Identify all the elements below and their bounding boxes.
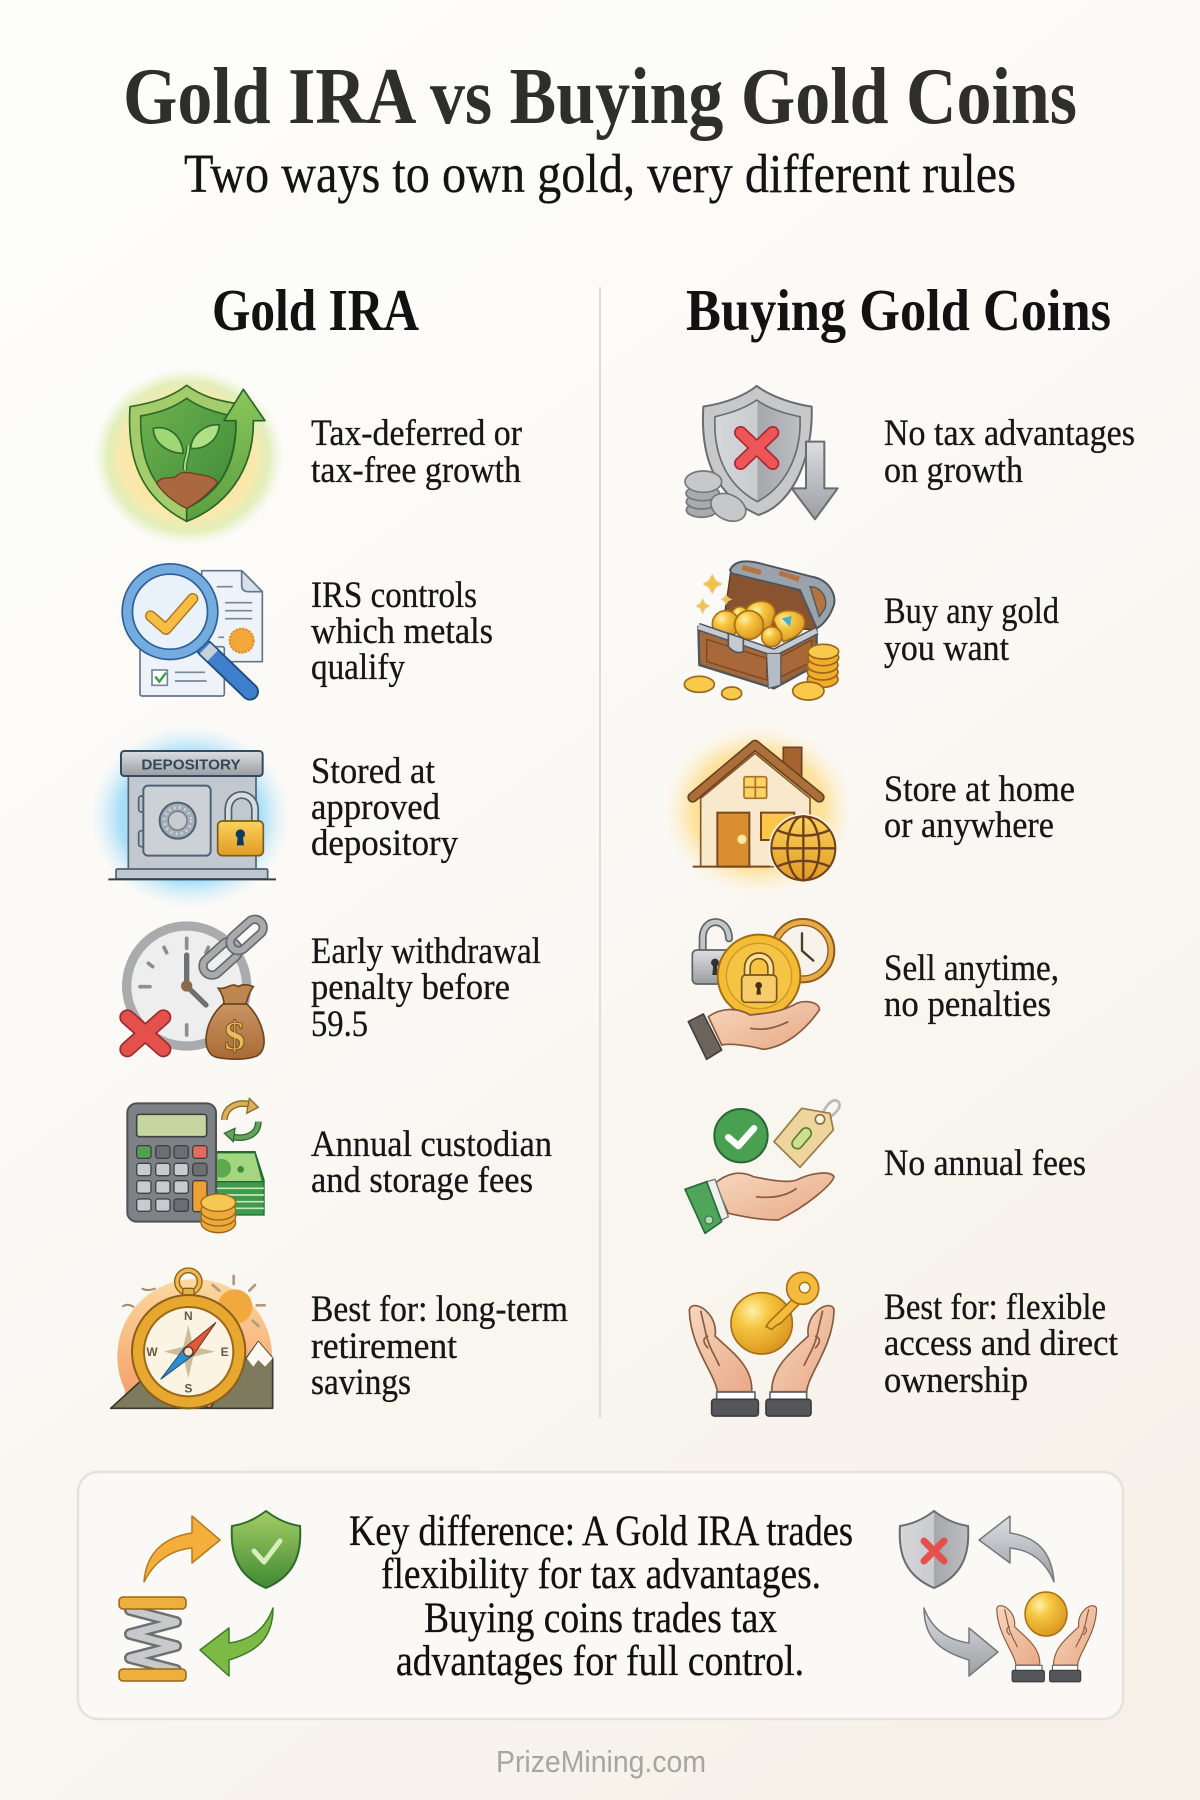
icon: compass with mountains and sun: S — [184, 1382, 192, 1396]
icon: silver shield with X — [900, 1511, 968, 1588]
row: early withdrawal penalty — [127, 916, 541, 1059]
row: best for flexible — [689, 1272, 1119, 1416]
column heading: Buying Gold Coins: Buying Gold Coins — [686, 277, 1111, 343]
text: store at home: or anywhere — [884, 805, 1054, 846]
title: Gold IRA vs Buying Gold Coins — [123, 53, 1077, 141]
icon: hands holding gold ball — [997, 1592, 1097, 1682]
row: sell anytime — [688, 919, 1059, 1059]
row: IRS controls metals — [127, 569, 493, 696]
text: best for long-term: Best for: long-term — [311, 1289, 568, 1330]
text: IRS controls metals — [311, 575, 493, 688]
icon: compass with mountains and sun: W — [146, 1345, 158, 1359]
row: best for long-term — [111, 1270, 568, 1408]
text: buy any gold: Buy any gold — [884, 591, 1059, 632]
arrow: orange — [144, 1516, 220, 1582]
panel: key difference callout — [78, 1472, 1123, 1719]
text: store at home: Store at home — [884, 769, 1075, 810]
icon group: flexibility traded for tax shield — [119, 1511, 300, 1681]
row: tax-deferred growth — [93, 368, 522, 545]
column heading: Gold IRA: Gold IRA — [212, 277, 419, 343]
text: key difference: Key difference: A Gold IRA trades — [349, 1508, 853, 1555]
icon: magnifier over documents — [127, 569, 262, 696]
text: sell anytime: Sell anytime, — [884, 948, 1059, 989]
row: annual fees — [127, 1098, 552, 1233]
text: tax-deferred growth — [311, 413, 522, 491]
text: stored at depository — [311, 751, 458, 864]
text: stored at depository: depository — [311, 823, 458, 864]
text: early withdrawal penalty: Early withdrawal — [311, 931, 541, 972]
icon: calculator, cash and coins — [127, 1098, 264, 1233]
text: best for long-term — [311, 1289, 568, 1403]
footer: source: PrizeMining.com — [496, 1744, 706, 1779]
text: no tax advantages — [884, 413, 1135, 491]
text: best for flexible — [884, 1287, 1119, 1401]
text: key difference: flexibility for tax advantages. — [381, 1551, 821, 1598]
text: store at home — [884, 769, 1075, 846]
icon: hands holding gold ball and key — [689, 1272, 834, 1416]
text: sell anytime: no penalties — [884, 984, 1051, 1025]
icon: compass with mountains and sun: N — [184, 1309, 193, 1323]
text: key difference: advantages for full control. — [396, 1638, 804, 1685]
icon: house with globe — [663, 725, 853, 895]
text: no annual fees: No annual fees — [884, 1143, 1086, 1184]
text: annual fees — [311, 1124, 552, 1201]
row: stored at depository — [90, 725, 458, 908]
arrow: gray bottom — [924, 1608, 998, 1676]
arrow: green — [200, 1608, 273, 1676]
text: tax-deferred growth: tax-free growth — [311, 450, 521, 491]
text: annual fees: and storage fees — [311, 1160, 533, 1201]
text: IRS controls metals: qualify — [311, 647, 405, 688]
row: no tax advantages — [685, 386, 1135, 527]
text: IRS controls metals: IRS controls — [311, 575, 477, 616]
text: stored at depository: approved — [311, 787, 440, 828]
text: no tax advantages: No tax advantages — [884, 413, 1135, 454]
icon: green shield with check — [232, 1511, 300, 1588]
icon: silver shield with X, coins and down arrow — [685, 386, 838, 527]
icon: compass with mountains and sun: E — [221, 1345, 229, 1359]
text: no tax advantages: on growth — [884, 450, 1023, 491]
text: tax-deferred growth: Tax-deferred or — [311, 413, 522, 454]
row: buy any gold — [684, 561, 1059, 700]
icon: depository vault with padlock: DEPOSITORY — [141, 757, 241, 773]
subtitle: Two ways to own gold, very different rules — [184, 143, 1016, 204]
icon: hand holding locked coin with clock — [688, 919, 834, 1059]
text: key difference: Buying coins trades tax — [424, 1595, 777, 1642]
icon: clock, chain, X and money bag — [127, 916, 267, 1059]
text: early withdrawal penalty: penalty before — [311, 967, 510, 1008]
text: best for long-term: retirement — [311, 1326, 458, 1367]
icon: hand with check and price tag — [685, 1100, 840, 1233]
icon: treasure chest with gold — [684, 561, 839, 700]
text: stored at depository: Stored at — [311, 751, 436, 792]
text: early withdrawal penalty — [311, 931, 541, 1045]
arrow: gray top — [979, 1516, 1054, 1582]
panel: Buying Gold Coins column — [663, 386, 1135, 1416]
text: sell anytime — [884, 948, 1059, 1025]
icon: spring — [119, 1597, 186, 1681]
text: key difference — [349, 1508, 853, 1685]
icon: depository vault with padlock — [90, 725, 290, 908]
text: best for long-term: savings — [311, 1362, 411, 1403]
row: no annual fees — [685, 1100, 1086, 1233]
text: best for flexible: Best for: flexible — [884, 1287, 1106, 1328]
text: best for flexible: access and direct — [884, 1323, 1119, 1364]
text: annual fees: Annual custodian — [311, 1124, 552, 1165]
text: buy any gold: you want — [884, 628, 1010, 669]
row: store at home — [663, 725, 1075, 895]
text: buy any gold — [884, 591, 1059, 669]
panel: Gold IRA column — [90, 368, 568, 1408]
text: early withdrawal penalty: 59.5 — [311, 1004, 368, 1045]
text: IRS controls metals: which metals — [311, 611, 493, 652]
icon: shield with sprout and up arrow — [93, 368, 283, 545]
icon group: tax advantages traded for control — [900, 1511, 1097, 1682]
icon: clock, chain, X and money bag: $ — [224, 1013, 245, 1059]
text: best for flexible: ownership — [884, 1360, 1028, 1401]
icon: compass with mountains and sun — [111, 1270, 273, 1408]
